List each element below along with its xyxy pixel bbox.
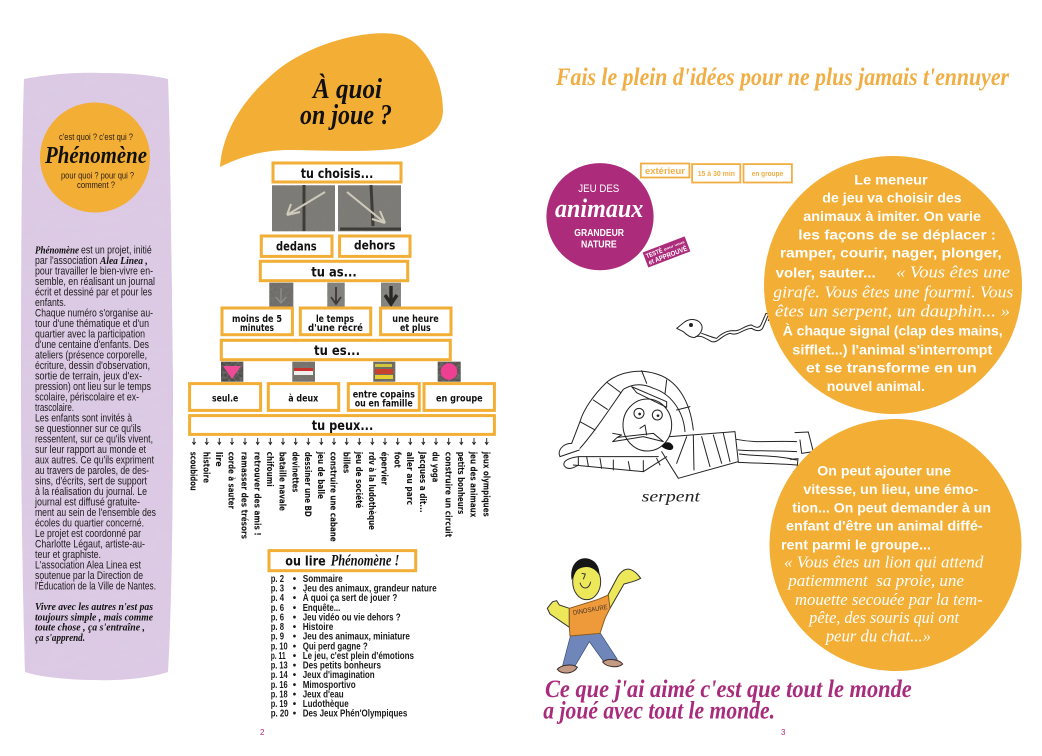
text circle: on peut ajouter: mouette secouée par la tem- (795, 590, 983, 609)
text circle: on peut ajouter: peur du chat...» (825, 626, 931, 646)
box: tu peux: tu peux... (312, 419, 373, 434)
text circle: le meneur: et se transforme en un (806, 361, 977, 377)
badge: jeu des animaux: NATURE (581, 238, 617, 250)
text block: project description: l'Éducation de la Ville de Nantes. (35, 579, 156, 592)
table of contents: À quoi ça sert de jouer ? (303, 592, 397, 604)
box: tu as: tu as... (311, 266, 357, 280)
page number 3: 3 (781, 728, 786, 737)
quote: ce que j'ai aimé: Ce que j'ai aimé c'est que tout le monde (545, 676, 912, 703)
text block: project description: au travers de paroles, de des- (35, 465, 149, 477)
box: tu es: tu es... (314, 344, 360, 359)
shirt (569, 595, 610, 636)
text block: project description: écoles du quartier concerné. (35, 517, 144, 529)
table of contents: p. 9 (271, 632, 284, 643)
text block: project description: semble, en réalisant un journal (35, 276, 155, 288)
hair (571, 558, 599, 580)
quote: ce que j'ai aimé: a joué avec tout le monde. (543, 698, 775, 724)
box: le temps d'une récré: le temps (316, 314, 354, 325)
table of contents: Jeux d'eau (303, 690, 344, 700)
photo: flèche sombre (381, 283, 401, 307)
table of contents: p. 19 (271, 699, 288, 710)
table of contents: Jeux d'imagination (303, 670, 375, 681)
table of contents: p. 14 (271, 670, 288, 681)
table of contents: p. 16 (271, 680, 288, 691)
table of contents: • (293, 699, 297, 710)
photo: triangle rose (221, 362, 243, 382)
text circle: le meneur (764, 156, 1022, 414)
text block: project description: sortie de terrain, jeux d'ex- (35, 370, 142, 382)
table of contents: • (293, 632, 297, 643)
box: en groupe: en groupe (436, 394, 483, 404)
text block: project description: Chaque numéro s'organise au- (35, 307, 153, 319)
photo: bande rouge et blanche (292, 362, 315, 382)
list: idées de jeux (texte vertical): jeu des animaux (468, 451, 479, 517)
box: moins de 5 minutes (222, 308, 292, 335)
text block: project description: trascolaire. (35, 402, 74, 414)
table of contents: p. 6 (271, 603, 284, 614)
table of contents: Le jeu, c'est plein d'émotions (303, 651, 414, 662)
text block: project description: Charlotte Légaut, artiste-au- (35, 538, 145, 550)
text block: closing sentence: ça s'apprend. (35, 632, 85, 644)
text circle: le meneur: « Vous êtes une (896, 262, 1010, 282)
badge: jeu des animaux: animaux (555, 194, 643, 223)
list: idées de jeux (texte vertical): Jacques a dit... (417, 451, 428, 513)
list: idées de jeux (texte vertical): devinettes (289, 452, 300, 493)
badge: Phénomène circle: comment ? (77, 179, 115, 190)
box: entre copains ou en famille: ou en famille (355, 398, 413, 409)
table of contents: Histoire (303, 622, 334, 633)
box: entre copains ou en famille: entre copains (353, 390, 415, 400)
box: à deux: à deux (288, 392, 319, 404)
list: idées de jeux (texte vertical): dessiner une BD (302, 452, 313, 517)
table of contents: p. 18 (271, 690, 288, 700)
box: tu peux (190, 416, 494, 434)
table of contents: • (293, 651, 297, 662)
photo: flèche dehors (338, 185, 401, 231)
heading: À quoi on joue speech bubble: on joue ? (300, 99, 392, 131)
tag: extérieur: extérieur (645, 166, 685, 177)
list: idées de jeux (texte vertical): billes (340, 452, 351, 474)
text circle: on peut ajouter (770, 419, 1022, 671)
badge: Phénomène circle: pour quoi ? pour qui ? (61, 169, 134, 180)
table of contents (271, 574, 437, 720)
text block: project description: écrit et dessiné par et pour les (35, 286, 152, 298)
photo: flèche dedans (272, 185, 335, 231)
box: dehors (340, 236, 410, 256)
text circle: on peut ajouter: On peut ajouter une (817, 464, 951, 480)
table of contents: Mimosportivo (303, 680, 356, 691)
text block: project description: ment au sein de l'ensemble des (35, 507, 156, 519)
box: une heure et plus (381, 308, 451, 335)
flowchart: choix de jeu (190, 163, 494, 434)
stamp: testé et approuvé: TESTÉ (644, 246, 664, 260)
quote: ce que j'ai aimé (543, 676, 912, 724)
shoes (557, 660, 623, 673)
photo: flèche moyenne (327, 283, 345, 307)
table of contents: p. 6 (271, 612, 284, 624)
table of contents: • (293, 593, 297, 604)
illustration: child drawing of a serpent (559, 371, 813, 478)
text block: project description: d'une centaine d'enfants. Des (35, 339, 149, 351)
list: idées de jeux (texte vertical): foot (391, 452, 402, 468)
stamp: testé et approuvé: pour vous (663, 240, 685, 252)
text block: project description: Alea Linea , (99, 255, 148, 267)
badge: Phénomène circle: c'est quoi ? c'est qui ? (59, 131, 133, 142)
text block: project description: pour travailler le bien-vivre en- (35, 265, 153, 277)
table of contents: Des petits bonheurs (303, 661, 381, 672)
text block: project description: sur leur rapport au monde et (35, 444, 146, 456)
table of contents: p. 2 (271, 574, 284, 585)
box: dedans: dedans (276, 238, 317, 254)
heading: À quoi on joue speech bubble: À quoi (311, 72, 382, 105)
box: dehors: dehors (354, 238, 395, 252)
text block: project description: journal est diffusé gratuite- (34, 496, 140, 508)
table of contents: Ludothèque (303, 699, 349, 710)
text circle: le meneur: ramper, courir, nager, plonger, (780, 246, 1002, 262)
table of contents: • (293, 574, 297, 585)
text circle: on peut ajouter: pête, des souris qui ont (808, 608, 960, 627)
list: idées de jeux (texte vertical): lire (213, 452, 224, 467)
list: idées de jeux (texte vertical): du yoga (430, 452, 441, 482)
text circle: le meneur: animaux à imiter. On varie (803, 209, 981, 225)
table of contents: p. 20 (271, 709, 289, 720)
text circle: on peut ajouter: enfant d'être un animal diffé- (786, 519, 983, 535)
table of contents: • (293, 622, 297, 633)
text block: project description: Les enfants sont invités à (35, 412, 132, 424)
table of contents: • (293, 680, 297, 691)
tag: 15 à 30 min (692, 164, 740, 182)
box: le temps d'une récré: d'une récré (308, 322, 363, 334)
text block: project description: Le projet est coordonné par (35, 528, 141, 540)
table of contents: Des Jeux Phén'Olympiques (303, 709, 408, 720)
stamp: testé et approuvé (643, 236, 690, 267)
text block: project description: ressentent, sur ce qu'ils vivent, (35, 433, 153, 445)
stamp: testé et approuvé: et APPROUVÉ (647, 244, 689, 267)
list: idées de jeux (texte vertical): construire un circuit (442, 452, 453, 538)
text circle: le meneur: êtes un serpent, un dauphin... » (775, 302, 1010, 320)
text block: project description: enfants. (35, 297, 66, 309)
text block: project description: est un projet, initié (81, 244, 152, 256)
text block: project description (34, 244, 156, 592)
box: en groupe (424, 384, 494, 410)
text circle: on peut ajouter: rent parmi le groupe... (781, 537, 931, 553)
list: idées de jeux (texte vertical): jeu de balle (315, 451, 326, 499)
text block: project description: Phénomène (35, 244, 79, 256)
heading: ou lire Phénomène: ou lire (285, 554, 326, 570)
table of contents: • (293, 709, 297, 720)
text block: project description: quartier avec la participation (35, 328, 145, 340)
text circle: le meneur: À chaque signal (clap des mains, (783, 323, 1003, 340)
text circle: le meneur: sifflet...) l'animal s'interrompt (792, 342, 993, 358)
illustration: coloured child drawing (547, 558, 641, 673)
text block: project description: par l'association (35, 255, 97, 267)
text circle: on peut ajouter: vitesse, un lieu, une émo- (803, 482, 979, 498)
tag: extérieur (641, 164, 689, 178)
text block: project description: se questionner sur ce qu'ils (35, 423, 141, 435)
box: une heure et plus: une heure (392, 314, 439, 325)
text block: project description: tour d'une thématique et d'un (35, 318, 149, 330)
caption: serpent handwriting: serpent (642, 488, 701, 506)
left arm (547, 601, 569, 627)
list: idées de jeux (texte vertical): retrouver des amis ! (251, 452, 262, 536)
table of contents: • (293, 584, 297, 595)
list: idées de jeux (texte vertical): chifoumi (264, 452, 275, 487)
badge: jeu des animaux (546, 163, 654, 270)
table of contents: Jeu des animaux, grandeur nature (303, 584, 437, 595)
table of contents: Enquête... (303, 603, 341, 614)
table of contents: p. 4 (271, 593, 284, 604)
head (573, 564, 601, 600)
text block: project description: pression) ont lieu sur le temps (35, 381, 151, 393)
list: idées de jeux (texte vertical): histoire (200, 452, 211, 483)
text block: project description: L'association Alea Linea est (35, 559, 141, 571)
box: le temps d'une récré (300, 308, 371, 335)
text block: project description: ateliers (présence corporelle, (35, 349, 147, 361)
badge: jeu des animaux: JEU DES (578, 183, 619, 195)
list: idées de jeux (texte vertical): bataille navale (277, 452, 288, 511)
heading: ou lire Phénomène (269, 551, 416, 571)
shirt text: DINOSAURE (572, 604, 609, 617)
text block: project description: écriture, dessin d'observation, (35, 360, 150, 372)
list: idées de jeux (texte vertical): aller au parc (404, 452, 415, 505)
text block: closing sentence: toujours simple , mais comme (35, 611, 153, 623)
tag: en groupe: en groupe (752, 169, 783, 178)
table of contents: Jeu des animaux, miniature (303, 632, 410, 643)
tag: en groupe (744, 164, 792, 182)
box: moins de 5 minutes: moins de 5 (232, 314, 282, 325)
panel: présentation de Phénomène (21, 73, 173, 680)
text circle: le meneur: les façons de se déplacer : (798, 227, 996, 243)
table of contents: p. 3 (271, 584, 284, 595)
text circle: on peut ajouter: « Vous êtes un lion qui attend (784, 552, 984, 572)
box: une heure et plus: et plus (400, 323, 431, 334)
table of contents: p. 8 (271, 622, 284, 633)
table of contents: p. 10 (271, 641, 288, 652)
list: idées de jeux (texte vertical): jeu de société (353, 451, 364, 508)
list: idées de jeux (texte vertical): jeux olympiques (480, 451, 491, 517)
badge: Phénomène circle (40, 102, 150, 212)
box: tu es (221, 340, 450, 360)
smile (580, 573, 591, 588)
text block: closing sentence: toute chose , ça s'entraîne , (35, 622, 145, 634)
list: idées de jeux (texte vertical): construire une cabane (328, 452, 339, 542)
table of contents: • (293, 612, 297, 624)
badge: jeu des animaux: GRANDEUR (574, 227, 624, 239)
table of contents: • (293, 690, 297, 700)
box: tu choisis: tu choisis... (301, 167, 373, 182)
illustration: snake drawing (677, 313, 771, 342)
text block: project description: teur et graphiste. (35, 549, 101, 561)
arrows: flèches vers les jeux (192, 438, 488, 444)
text circle: le meneur: voler, sauter... (776, 266, 876, 282)
table of contents: p. 11 (271, 651, 286, 662)
table of contents: • (293, 641, 297, 652)
list: idées de jeux (texte vertical): scoubidou (188, 452, 199, 491)
heading: ou lire Phénomène: Phénomène ! (331, 552, 399, 570)
photo: bande rouge et jaune (373, 362, 395, 382)
box: tu as (260, 261, 408, 281)
text circle: le meneur: nouvel animal. (827, 379, 925, 395)
list: idées de jeux (texte vertical): épervier (379, 452, 390, 485)
text block: closing sentence (35, 601, 153, 644)
tag: 15 à 30 min: 15 à 30 min (698, 169, 735, 178)
text circle: le meneur: Le meneur (854, 172, 928, 188)
panel background: lilac texture (21, 73, 173, 680)
table of contents: Jeu vidéo ou vie dehors ? (303, 612, 401, 624)
text block: project description: scolaire, périscolaire et ex- (35, 391, 139, 403)
list: idées de jeux (texte vertical): petits bonheurs (455, 452, 466, 515)
table of contents: Sommaire (303, 574, 343, 585)
list: idées de jeux (texte vertical): ramasser des trésors (239, 452, 250, 539)
box: seul.e: seul.e (212, 394, 239, 404)
list: idées de jeux (texte vertical): rdv à la ludothèque (366, 452, 377, 530)
box: entre copains ou en famille (348, 384, 419, 410)
box: dedans (261, 236, 332, 256)
table of contents: • (293, 603, 297, 614)
photo: rond rose (438, 362, 461, 382)
table of contents: • (293, 670, 297, 681)
box: à deux (268, 384, 339, 410)
text circle: on peut ajouter: patiemment sa proie, une (787, 571, 964, 590)
box: tu choisis (273, 163, 401, 182)
text block: project description: sins, d'écrits, sert de support (35, 475, 147, 487)
table of contents: p. 13 (271, 661, 288, 672)
right arm (607, 569, 641, 608)
text block: project description: à la réalisation du journal. Le (35, 486, 147, 498)
jeans (563, 632, 617, 666)
box: moins de 5 minutes: minutes (240, 323, 274, 334)
text block: project description: soutenue par la Direction de (35, 570, 143, 582)
text circle: le meneur: de jeu va choisir des (822, 191, 962, 207)
text block: project description: aux autres. Ce qu'ils expriment (35, 454, 154, 466)
heading: À quoi on joue speech bubble (220, 33, 443, 167)
page number 2: 2 (260, 728, 265, 737)
table of contents: • (293, 661, 297, 672)
photo: flèche claire (269, 283, 293, 307)
list: idées de jeux (texte vertical) (188, 451, 491, 542)
text block: closing sentence: Vivre avec les autres n'est pas (35, 601, 153, 613)
box: seul.e (190, 384, 261, 410)
table of contents: Qui perd gagne ? (303, 641, 368, 652)
text circle: le meneur: girafe. Vous êtes une fourmi. Vous (773, 282, 1014, 302)
text circle: on peut ajouter: tion... On peut demander à un (792, 500, 991, 516)
badge: Phénomène circle: Phénomène (44, 143, 147, 169)
list: idées de jeux (texte vertical): corde à sauter (226, 452, 237, 509)
